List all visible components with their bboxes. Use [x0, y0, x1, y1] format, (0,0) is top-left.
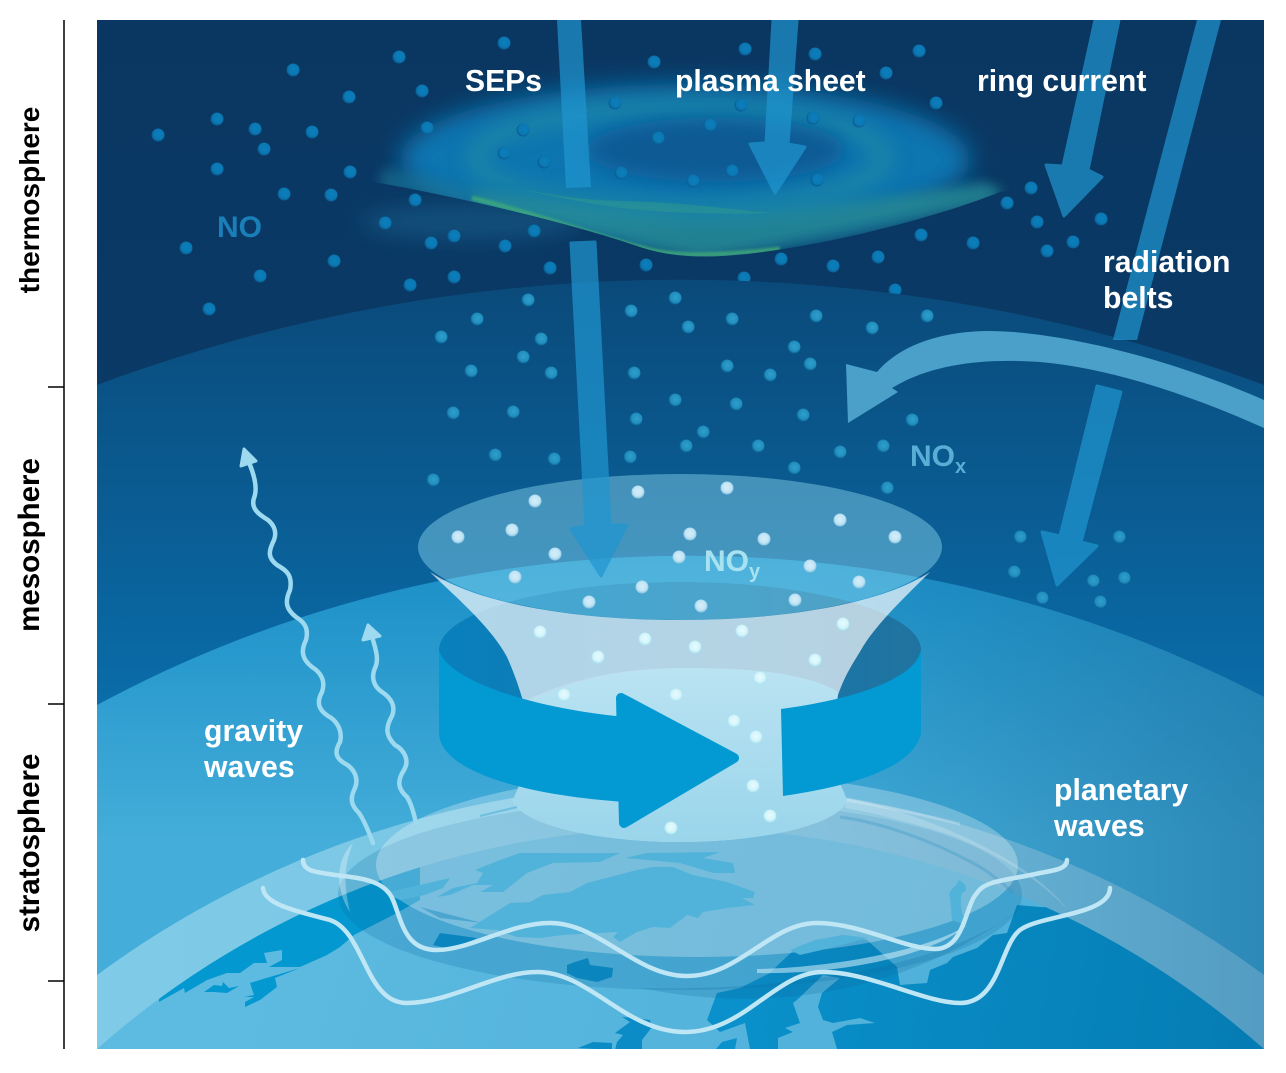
arrow: radiation belts: [1042, 20, 1221, 585]
layer: stratosphere dome: [97, 556, 1264, 1049]
label: gravity waves: gravity: [204, 715, 303, 748]
label: radiation belts: belts: [1103, 282, 1173, 315]
gravity wave 2: [363, 625, 416, 823]
label: ring current: ring current: [977, 65, 1146, 98]
NOy particles: [452, 482, 902, 834]
land masses: [159, 860, 1264, 1050]
label: NOx: x: [955, 456, 966, 478]
NO particles: [152, 36, 1108, 316]
arrow: plasma sheet: [750, 20, 805, 193]
label: NOy: y: [749, 561, 761, 583]
Eurasia and Scandinavia: [707, 905, 1264, 1049]
label: NOx: NO: [910, 440, 955, 473]
planetary wave lower: [263, 888, 1110, 1032]
label: planetary waves: waves: [1053, 810, 1145, 843]
axis label: thermosphere: thermosphere: [14, 107, 45, 293]
label: planetary waves: planetary: [1054, 774, 1188, 807]
Norway coast: [790, 935, 868, 955]
label: NO: NO: [217, 211, 262, 244]
layer: thermosphere background: [97, 20, 1264, 385]
axis label: mesosphere: mesosphere: [13, 458, 46, 632]
layer: mesosphere dome: [97, 280, 1264, 705]
aurora oval: [360, 84, 1000, 258]
label: gravity waves: waves: [203, 751, 295, 784]
Iceland: [567, 958, 613, 982]
Britain: [615, 1017, 652, 1050]
arrow: NOx transport curved: [846, 331, 1264, 428]
funnel mouth: [418, 474, 942, 620]
axis label: stratosphere: stratosphere: [13, 754, 46, 932]
arrow head: [621, 698, 734, 823]
gravity wave 1: [241, 449, 373, 843]
earth atmosphere band: [97, 784, 1264, 1049]
arrow: SEPs: [557, 20, 627, 576]
label: plasma sheet: plasma sheet: [675, 65, 866, 98]
label: radiation belts: [1103, 246, 1230, 315]
label: radiation belts: radiation: [1103, 246, 1230, 279]
label: NOy: NO: [704, 545, 749, 578]
label: SEPs: SEPs: [465, 65, 542, 98]
earth: [97, 828, 1264, 1050]
polar vortex front band with arrow: [439, 650, 921, 823]
label: planetary waves: [1053, 774, 1188, 843]
Greenland: [470, 867, 755, 942]
label: gravity waves: [203, 715, 303, 784]
left axis: [48, 20, 64, 1049]
Arctic islands: [437, 853, 620, 897]
NOx particles: [426, 292, 1130, 608]
Arctic land on vortex disc: [385, 852, 966, 955]
band right part: [781, 650, 921, 796]
polar vortex back wall: [439, 582, 921, 700]
funnel lower interior: [513, 668, 847, 842]
Svalbard: [949, 880, 966, 925]
funnel body: [430, 572, 930, 842]
vortex ground rings: [338, 773, 1068, 999]
NOy funnel: [418, 474, 942, 842]
planetary wave upper: [303, 860, 1067, 976]
band left part: [439, 650, 625, 802]
arrow: ring current: [1046, 20, 1119, 216]
